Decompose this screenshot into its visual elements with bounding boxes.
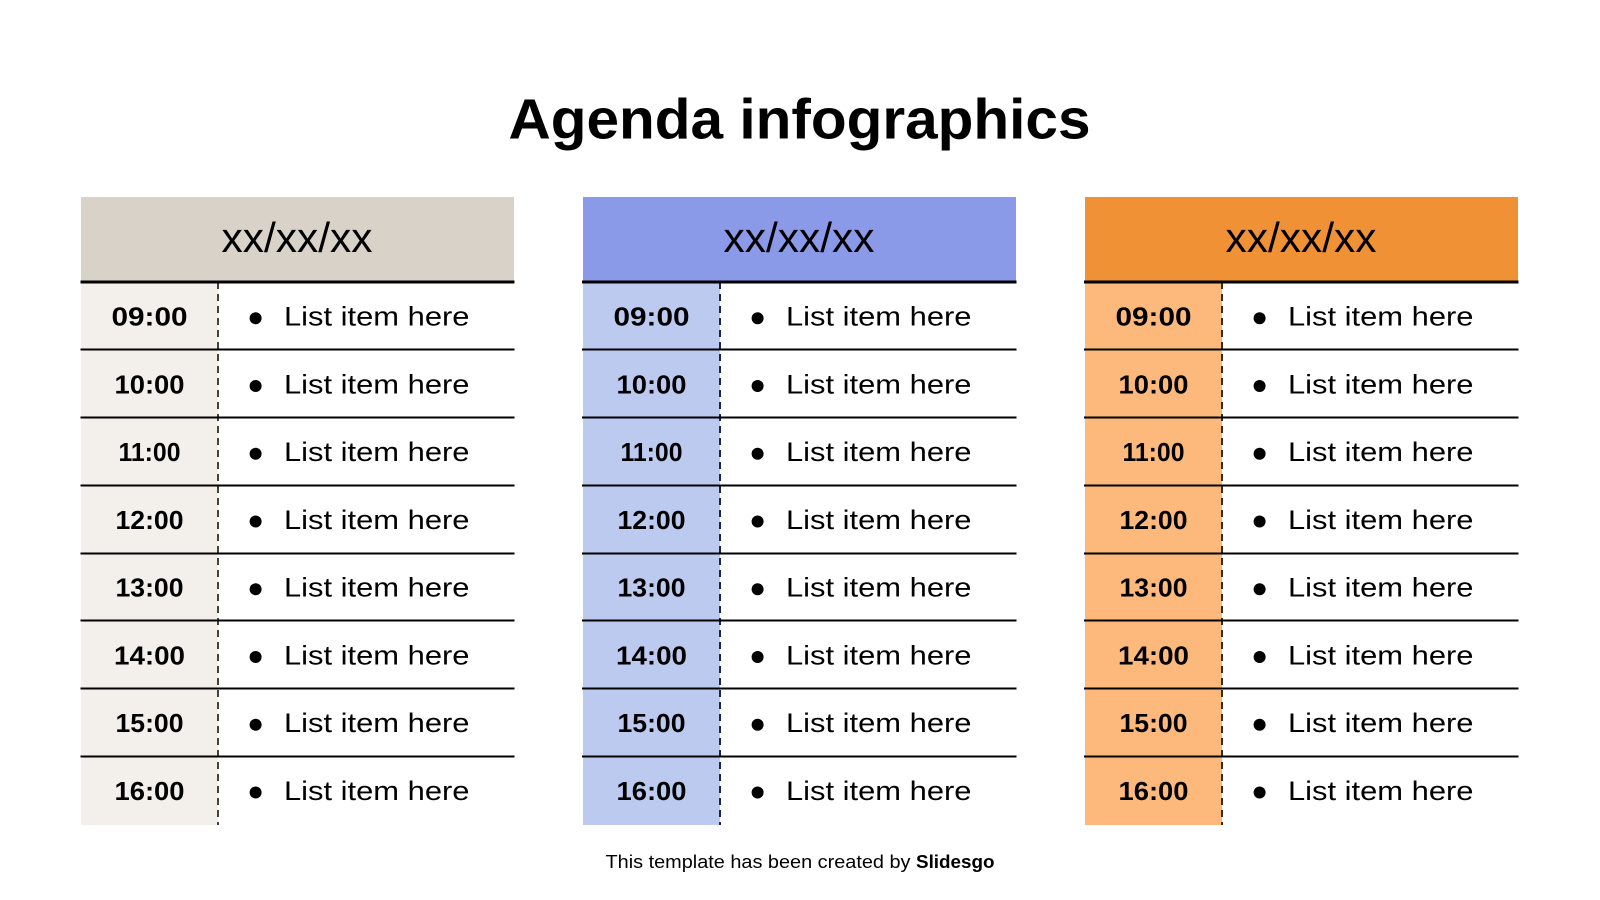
day 1 row 10:00: List item here	[284, 369, 470, 399]
day 2 row 16:00	[583, 756, 972, 825]
day 2 row 12:00	[583, 485, 972, 553]
day 1 row 10:00	[81, 350, 470, 418]
panel: day 3 agenda	[1084, 197, 1518, 825]
day 1 row 15:00: List item here	[284, 708, 470, 738]
day 1 row 15:00	[81, 688, 470, 756]
day 1 row 13:00: 13:00	[116, 572, 184, 602]
day 1 row 11:00: List item here	[284, 437, 470, 467]
day 3 row 15:00: 15:00	[1120, 708, 1188, 738]
day 3 row 13:00: 13:00	[1120, 572, 1188, 602]
day 3 row 12:00: List item here	[1288, 505, 1474, 535]
day 1 row 12:00: List item here	[284, 505, 470, 535]
day 2 row 14:00: 14:00	[616, 640, 687, 670]
panel: day 1 agenda	[80, 197, 514, 825]
day 2 row 15:00: 15:00	[618, 708, 686, 738]
day 3 row 11:00	[1085, 418, 1474, 485]
day 2 row 10:00	[583, 350, 972, 418]
day 1 date header	[81, 197, 514, 282]
day 1 row 09:00: 09:00	[112, 302, 188, 332]
day 2 date header	[583, 197, 1016, 282]
day 2 row 09:00: 09:00	[614, 302, 690, 332]
day 1 row 14:00	[81, 621, 470, 688]
day 2 row 11:00: 11:00	[620, 437, 682, 467]
footer credit: This template has been created by	[606, 852, 910, 872]
day 3 row 09:00: 09:00	[1116, 302, 1192, 332]
day 2 row 16:00: List item here	[786, 776, 972, 806]
day 3 row 10:00: List item here	[1288, 369, 1474, 399]
day 1 row 09:00: List item here	[284, 302, 470, 332]
day 1 row 13:00	[81, 553, 470, 621]
day 1 row 11:00: 11:00	[118, 437, 180, 467]
day 1 row 16:00: List item here	[284, 776, 470, 806]
day 2 row 10:00: List item here	[786, 369, 972, 399]
day 3 row 13:00: List item here	[1288, 572, 1474, 602]
day 1 row 16:00: 16:00	[114, 776, 184, 806]
day 2 row 15:00	[583, 688, 972, 756]
day 3 row 10:00: 10:00	[1118, 369, 1188, 399]
day 2 row 14:00	[583, 621, 972, 688]
panel: day 2 agenda	[582, 197, 1016, 825]
day 3 row 11:00: List item here	[1288, 437, 1474, 467]
day 2 row 09:00	[583, 282, 972, 350]
day 3 row 12:00: 12:00	[1120, 505, 1188, 535]
day 2 row 13:00	[583, 553, 972, 621]
footer credit: Slidesgo	[916, 852, 995, 872]
day 3 row 14:00	[1085, 621, 1474, 688]
day 1 date header: xx/xx/xx	[222, 214, 372, 261]
day 2 row 13:00: List item here	[786, 572, 972, 602]
day 2 row 09:00: List item here	[786, 302, 972, 332]
day 3 row 12:00	[1085, 485, 1474, 553]
day 3 row 09:00	[1085, 282, 1474, 350]
day 2 row 12:00: 12:00	[618, 505, 686, 535]
day 3 row 14:00: 14:00	[1118, 640, 1189, 670]
day 1 row 12:00: 12:00	[116, 505, 184, 535]
day 1 row 13:00: List item here	[284, 572, 470, 602]
day 3 row 11:00: 11:00	[1122, 437, 1184, 467]
day 2 row 11:00: List item here	[786, 437, 972, 467]
day 3 row 15:00	[1085, 688, 1474, 756]
day 3 row 10:00	[1085, 350, 1474, 418]
day 2 row 10:00: 10:00	[616, 369, 686, 399]
day 2 row 16:00: 16:00	[616, 776, 686, 806]
day 1 row 16:00	[81, 756, 470, 825]
day 3 row 15:00: List item here	[1288, 708, 1474, 738]
day 1 row 09:00	[81, 282, 470, 350]
day 3 date header: xx/xx/xx	[1226, 214, 1376, 261]
day 3 row 16:00	[1085, 756, 1474, 825]
day 1 row 14:00: 14:00	[114, 640, 185, 670]
day 2 row 13:00: 13:00	[618, 572, 686, 602]
day 1 row 10:00: 10:00	[114, 369, 184, 399]
day 3 row 16:00: List item here	[1288, 776, 1474, 806]
day 1 row 12:00	[81, 485, 470, 553]
day 3 row 13:00	[1085, 553, 1474, 621]
day 1 row 14:00: List item here	[284, 640, 470, 670]
day 3 row 14:00: List item here	[1288, 640, 1474, 670]
day 3 row 09:00: List item here	[1288, 302, 1474, 332]
day 2 row 14:00: List item here	[786, 640, 972, 670]
day 3 row 16:00: 16:00	[1118, 776, 1188, 806]
day 3 date header	[1085, 197, 1518, 282]
day 1 row 11:00	[81, 418, 470, 485]
day 2 date header: xx/xx/xx	[724, 214, 874, 261]
day 2 row 12:00: List item here	[786, 505, 972, 535]
day 2 row 15:00: List item here	[786, 708, 972, 738]
title: Agenda infographics	[508, 88, 1090, 152]
day 2 row 11:00	[583, 418, 972, 485]
day 1 row 15:00: 15:00	[116, 708, 184, 738]
